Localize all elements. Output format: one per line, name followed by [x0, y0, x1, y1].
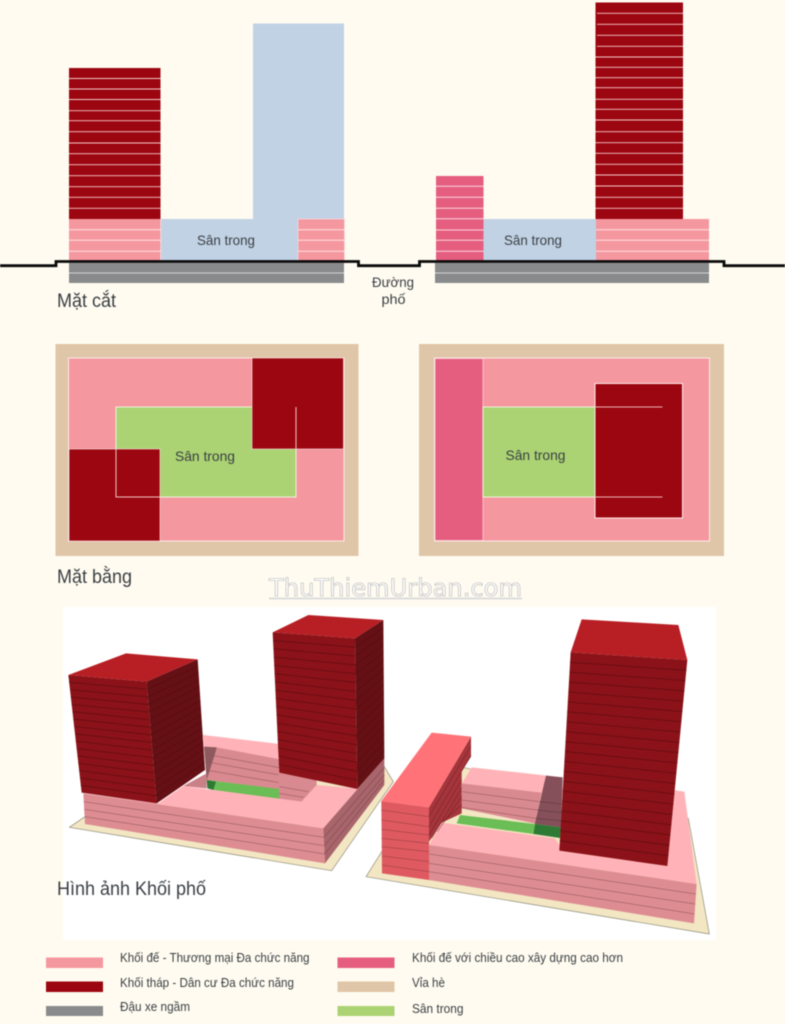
courtyard green — [457, 815, 561, 838]
tower plan — [595, 384, 682, 518]
courtyard and ghost tower — [161, 24, 344, 262]
tower block section — [69, 68, 160, 219]
legend item: sidewalk: Vỉa hè — [412, 975, 445, 990]
heading: plan: Mặt bằng — [57, 566, 132, 588]
courtyard label: Sân trong — [197, 232, 255, 248]
legend item: taller podium — [338, 950, 623, 968]
sidewalk — [56, 344, 358, 556]
courtyard side walls — [183, 768, 317, 802]
courtyard rear wall — [204, 747, 280, 789]
underground parking — [69, 263, 344, 283]
panel: section diagram left — [69, 24, 344, 283]
podium front face — [429, 845, 697, 923]
sidewalk — [419, 344, 724, 556]
podium rear strip — [203, 735, 280, 760]
courtyard outline over towers — [116, 407, 296, 497]
tower plan bottom left — [69, 449, 160, 541]
podium plan — [434, 358, 710, 541]
tower two — [273, 615, 384, 789]
courtyard plan — [116, 407, 296, 497]
courtyard label: Sân trong — [506, 447, 566, 463]
street label: Đường — [372, 274, 414, 290]
heading: section: Mặt cắt — [57, 290, 117, 312]
sidewalk base — [366, 767, 709, 934]
legend item: courtyard — [338, 1001, 464, 1016]
heading: block view: Hình ảnh Khối phố — [57, 879, 206, 900]
legend item: courtyard: Sân trong — [412, 1001, 464, 1016]
panel: plan diagram left — [56, 344, 358, 556]
courtyard outline over tower — [595, 407, 662, 497]
taller podium plan — [435, 358, 483, 540]
underground parking — [435, 263, 709, 283]
3D block right — [366, 619, 709, 934]
courtyard label: Sân trong — [504, 232, 562, 248]
tower — [559, 619, 687, 866]
podium side face — [323, 758, 384, 863]
podium roof — [83, 758, 384, 828]
legend item: tower: Khối tháp - Dân cư Đa chức năng — [120, 975, 294, 990]
legend — [46, 950, 623, 1016]
panel: section diagram right — [435, 2, 709, 283]
courtyard green — [207, 780, 280, 799]
courtyard plan — [483, 407, 595, 497]
legend item: podium — [46, 950, 310, 968]
tower plan top right — [252, 358, 344, 449]
podium roof — [429, 733, 697, 884]
tower one — [68, 653, 205, 803]
podium rear strip — [462, 767, 563, 795]
street label — [372, 274, 414, 307]
3D block left — [68, 615, 393, 871]
podium section — [596, 219, 709, 262]
legend item: tower — [46, 975, 294, 992]
legend item: parking — [46, 999, 190, 1016]
tower shadow on wall — [535, 776, 563, 827]
taller podium block — [436, 176, 484, 262]
podium section left — [69, 219, 160, 262]
sidewalk base — [69, 767, 393, 871]
courtyard label: Sân trong — [175, 448, 235, 464]
legend item: taller podium: Khối đế với chiều cao xây dựng cao hơn — [412, 950, 623, 965]
courtyard rear wall — [461, 783, 542, 823]
podium section right — [298, 219, 344, 262]
legend item: parking: Đậu xe ngầm — [120, 999, 190, 1014]
legend item: sidewalk — [338, 975, 445, 992]
street label: phố — [382, 291, 406, 307]
podium front face — [83, 793, 325, 863]
courtyard section — [483, 219, 596, 262]
panel: plan diagram right — [419, 344, 724, 556]
podium plan — [68, 358, 344, 541]
taller podium block — [381, 733, 471, 880]
legend item: podium: Khối đế - Thương mại Đa chức năng — [120, 950, 310, 965]
panel: 3D view background — [63, 607, 716, 940]
tower block section — [596, 2, 683, 219]
watermark: ThuThiemUrban.com — [268, 574, 522, 602]
ground line — [0, 262, 785, 266]
